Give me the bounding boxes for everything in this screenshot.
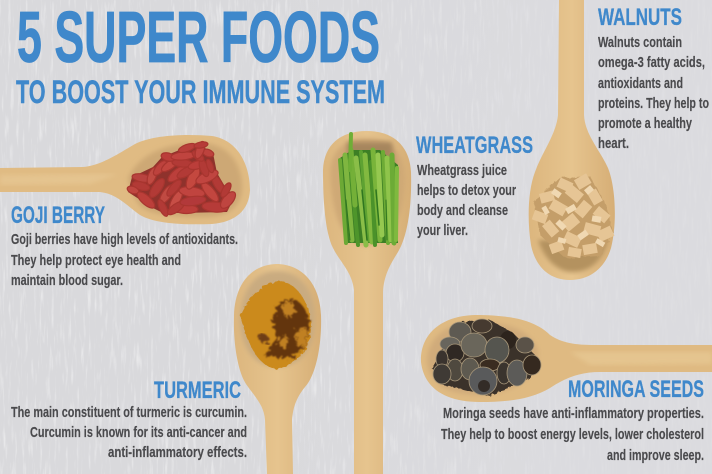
- text: wheatgrass: helps to detox your: [417, 182, 516, 199]
- text: turmeric: The main constituent of turmeric is curcumin.: [11, 404, 247, 421]
- text: turmeric: Curcumin is known for its anti-cancer and: [30, 424, 247, 441]
- walnut pieces: [532, 173, 614, 258]
- panel: walnuts: [529, 0, 709, 280]
- text: turmeric: [11, 404, 247, 461]
- text: moringa seeds: [441, 405, 704, 464]
- title: TO BOOST YOUR IMMUNE SYSTEM: [16, 74, 385, 110]
- text: walnuts: heart.: [598, 135, 629, 152]
- text: goji berry: maintain blood sugar.: [11, 272, 123, 289]
- turmeric powder: [240, 281, 311, 369]
- title: 5 SUPER FOODS: [17, 0, 380, 78]
- text: turmeric: anti-inflammatory effects.: [108, 444, 247, 461]
- spoon: wheatgrass: [323, 131, 411, 474]
- text: goji berry: They help protect eye health and: [11, 252, 181, 269]
- wheatgrass blades: [340, 134, 398, 245]
- spoon: turmeric: [234, 264, 321, 474]
- moringa seed pods: [432, 319, 541, 396]
- text: wheatgrass: [417, 162, 516, 239]
- text: goji berry: [11, 231, 238, 289]
- heading: goji berry: GOJI BERRY: [11, 202, 105, 229]
- text: wheatgrass: your liver.: [417, 222, 468, 239]
- panel: moringa seeds: [421, 315, 712, 464]
- heading: wheatgrass: WHEATGRASS: [416, 132, 533, 159]
- heading: turmeric: TURMERIC: [154, 377, 241, 404]
- spoon: moringa: [421, 315, 712, 402]
- panel: wheatgrass: [323, 131, 533, 474]
- goji berries: [126, 140, 238, 218]
- panel: turmeric: [11, 264, 321, 474]
- text: goji berry: Goji berries have high levels of antioxidants.: [11, 231, 238, 248]
- text: walnuts: Walnuts contain: [598, 34, 682, 51]
- title: [16, 0, 385, 110]
- text: wheatgrass: body and cleanse: [417, 202, 508, 219]
- panel: goji berry: [0, 135, 250, 289]
- spoon: walnuts: [529, 0, 615, 280]
- text: walnuts: [598, 34, 709, 152]
- text: wheatgrass: Wheatgrass juice: [417, 162, 507, 179]
- spoon: goji: [0, 135, 250, 224]
